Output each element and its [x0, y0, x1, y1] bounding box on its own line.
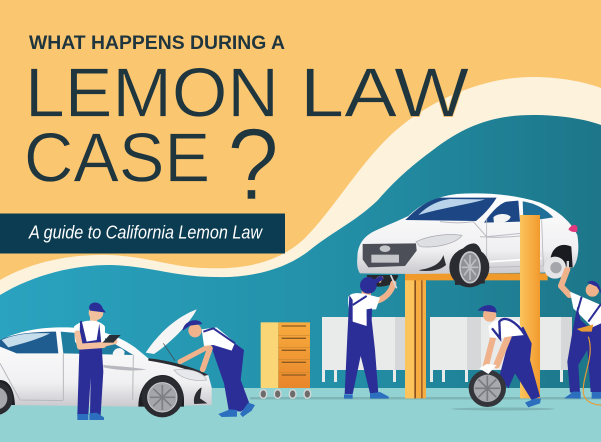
title: question mark: ? — [227, 108, 279, 222]
white car with open hood — [0, 309, 212, 417]
lift right post — [520, 215, 540, 398]
open hood — [146, 309, 197, 354]
mechanic lifting tire — [469, 305, 541, 407]
white car on lift — [357, 193, 578, 287]
mechanic under car left — [344, 275, 397, 399]
title: lemon: LEMON — [25, 54, 279, 132]
garage fence — [322, 317, 572, 382]
teal wave — [0, 115, 601, 390]
tool cart — [260, 322, 311, 398]
lift left post — [405, 280, 426, 398]
floor — [0, 388, 601, 442]
title: law: LAW — [300, 54, 469, 132]
mechanic with tablet — [74, 303, 121, 420]
title: case: CASE — [24, 118, 210, 196]
heading: what happens: WHAT HAPPENS DURING A — [29, 32, 285, 54]
banner — [0, 214, 285, 254]
banner text: A guide to California Lemon Law — [28, 222, 263, 242]
cream wave — [0, 77, 601, 300]
car lift and raised car — [344, 193, 601, 407]
floor shadows — [250, 397, 601, 410]
lift crossbar — [405, 273, 548, 280]
mechanic under hood — [180, 320, 255, 417]
mechanic under car right — [561, 261, 601, 405]
